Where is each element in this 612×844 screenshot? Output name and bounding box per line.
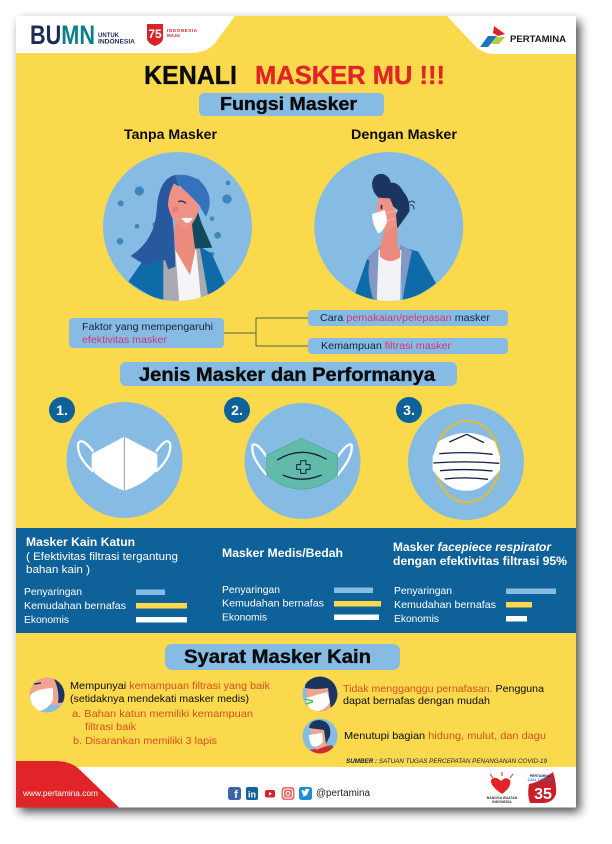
column 3: respirator: dengan efektivitas filtrasi 95% [393,556,567,568]
column 3: respirator: Masker facepiece respirator [393,542,552,554]
heading: Fungsi Masker [199,93,384,116]
logo: BUMN: INDONESIA [98,40,136,46]
column 1: cloth mask: ( Efektivitas filtrasi tergantung [26,551,178,563]
column 2: medical mask: Penyaringan [222,584,280,596]
column 3: respirator: Kemudahan bernafas [394,599,496,611]
logo: Bangga Buatan Indonesia: INDONESIA [492,800,512,804]
virus particles [117,179,232,256]
factor: filtration [308,338,508,354]
heading: Fungsi Masker: Fungsi Masker [220,94,357,114]
column 3: respirator [393,542,567,625]
factor box [69,318,224,348]
requirement: coverage [302,718,546,756]
requirement: filtration: filtrasi baik [85,721,137,733]
title highlight: MASKER MU !!! [255,60,445,90]
requirement: filtration: a. Bahan katun memiliki kemampuan [72,708,253,720]
label: Dengan Masker: Dengan Masker [351,127,458,142]
bars column 1 [136,590,187,622]
source note: SUMBER : SATUAN TUGAS PERCEPATAN PENANGANAN COVID-19 [346,758,547,765]
logo: BUMN: BUMN [30,20,95,50]
social media icons [228,787,312,801]
mask 3: respirator [396,397,524,520]
requirement: filtration [29,677,271,747]
column 1: cloth mask: Masker Kain Katun [26,537,135,549]
logo: Indonesia Maju 75: MAJU [167,33,180,38]
column 2: medical mask: Masker Medis/Bedah [222,548,343,560]
illustration: man with mask [314,152,463,303]
icon: facebook: f [234,789,238,801]
header right white panel with Pertamina logo [447,16,576,54]
panel: mask performance band [16,528,576,633]
title: KENALI [144,60,237,90]
column 1: cloth mask: Penyaringan [24,586,82,598]
column 1: cloth mask: bahan kain ) [26,564,90,576]
requirement: filtration: (setidaknya mendekati masker medis) [70,693,249,705]
logo: BUMN: UNTUK [98,33,120,39]
logo: Indonesia Maju 75: INDONESIA [167,28,198,33]
heading: Syarat Masker Kain: Syarat Masker Kain [184,646,371,668]
column 2: medical mask [222,548,381,624]
logo: Pertamina call center 135 [528,772,556,803]
logo: Pertamina call center 135: 35 [534,786,552,803]
badge 1: 1. [56,402,68,418]
icon: youtube [265,790,275,798]
column 2: medical mask: Ekonomis [222,612,267,624]
logo: Bangga Buatan Indonesia [487,772,518,804]
badge 2: 2. [231,402,243,418]
mask 1: cloth [49,397,182,518]
requirement: breathing [302,676,544,712]
column 3: respirator: Ekonomis [394,613,439,625]
bars column 2 [334,588,381,620]
diagram: factors of mask effectiveness [69,310,508,354]
logo: Pertamina call center 135: PERTAMINA [530,774,551,778]
logo: Pertamina: PERTAMINA [510,34,566,45]
factor box: Faktor yang mempengaruhi [82,321,213,333]
bars column 3 [506,588,556,622]
factor box: efektivitas masker [82,334,168,346]
factor: filtration: Kemampuan filtrasi masker [321,340,452,352]
icon: twitter [299,787,312,800]
illustration: woman without mask [103,152,252,303]
connector lines [224,318,308,346]
logo: BUMN [30,20,136,50]
red corner with website [16,761,119,808]
column 1: cloth mask [24,537,187,626]
icon: man breathing [302,676,338,712]
red corner with website: www.pertamina.com [22,789,98,798]
logo: Indonesia Maju 75: 75 [148,27,162,41]
logo: Bangga Buatan Indonesia: BANGGA BUATAN [487,796,518,800]
logo: Pertamina call center 135: CALL CENTER [528,778,553,782]
column 1: cloth mask: Kemudahan bernafas [24,600,126,612]
mask 2: surgical [224,397,360,519]
requirement: filtration: b. Disarankan memiliki 3 lapis [73,735,217,747]
label: Tanpa Masker: Tanpa Masker [124,127,218,142]
icon: man covered face [302,718,338,756]
heading: Jenis Masker dan Performanya: Jenis Masker dan Performanya [139,365,435,386]
requirement: coverage: Menutupi bagian hidung, mulut, dan dagu [344,730,546,742]
requirement: filtration: Mempunyai kemampuan filtrasi yang baik [70,680,271,692]
icon: bald man with mask [29,677,66,712]
social handle: @pertamina [316,788,370,799]
logo: Indonesia Maju 75 [147,24,198,46]
column 1: cloth mask: Ekonomis [24,614,69,626]
header left white panel [16,16,235,53]
icon: instagram [282,787,294,800]
factor: usage [308,310,508,326]
requirement: breathing: dapat bernafas dengan mudah [343,695,490,707]
icon: linkedin: in [248,790,256,800]
column 3: respirator: Penyaringan [394,585,452,597]
heading: Syarat Masker Kain [165,644,400,670]
footer [16,761,576,808]
factor: usage: Cara pemakaian/pelepasan masker [320,312,491,324]
column 2: medical mask: Kemudahan bernafas [222,598,324,610]
badge 3: 3. [403,402,415,418]
requirement: breathing: Tidak mengganggu pernafasan. Pengguna [343,683,544,695]
